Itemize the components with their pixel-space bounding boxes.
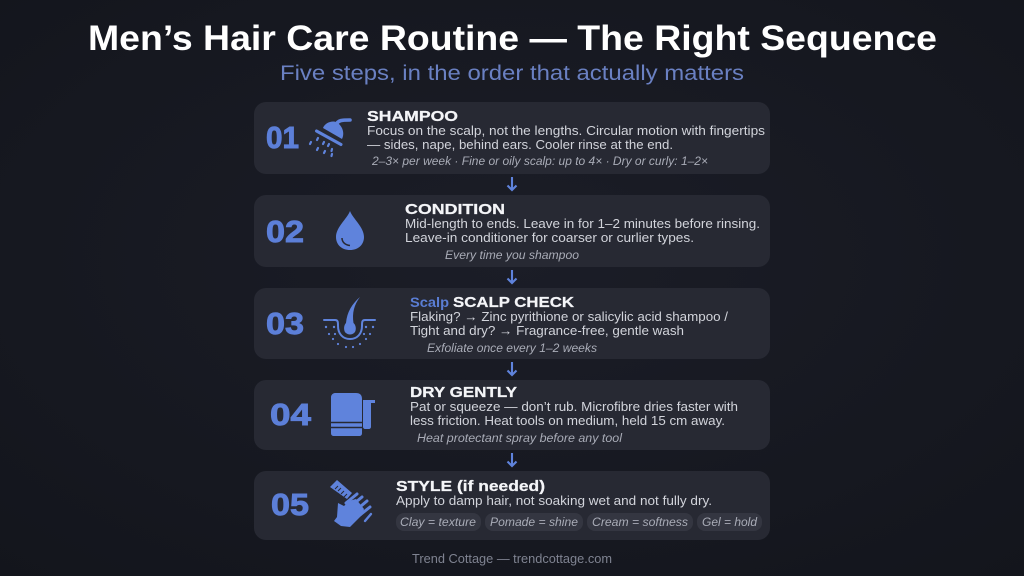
body text (367, 123, 766, 152)
icon: towel (331, 393, 375, 436)
heading: CONDITION (405, 201, 505, 218)
panel: step 4 dry gently (254, 380, 770, 450)
icon: hand with comb (330, 480, 371, 527)
heading: SHAMPOO (367, 108, 458, 125)
title: Men’s Hair Care Routine — The Right Sequence (88, 19, 937, 58)
pill: gel (697, 513, 762, 531)
arrow 2 to 3 (508, 270, 516, 283)
body text (410, 399, 738, 428)
pill: cream: Cream = softness (592, 517, 688, 529)
heading: Scalp (410, 294, 449, 310)
footer credit: Trend Cottage — trendcottage.com (412, 552, 612, 566)
pill: clay: Clay = texture (400, 517, 476, 529)
pill: gel: Gel = hold (702, 517, 758, 529)
pill: pomade: Pomade = shine (490, 517, 578, 529)
body text: Flaking? → Zinc pyrithione or salicylic acid shampoo / (410, 309, 728, 324)
heading: SCALP CHECK (453, 294, 574, 311)
body text: — sides, nape, behind ears. Cooler rinse at the end. (367, 137, 673, 152)
step number 05: 05 (271, 487, 309, 522)
step number 01: 01 (266, 120, 299, 155)
pill: cream (587, 513, 693, 531)
panel: step 1 shampoo (254, 102, 770, 174)
frequency note: Exfoliate once every 1–2 weeks (427, 343, 597, 355)
body text: Apply to damp hair, not soaking wet and not fully dry. (396, 493, 712, 508)
heading: DRY GENTLY (410, 384, 517, 401)
frequency note: Every time you shampoo (445, 250, 580, 262)
icon: shower head (310, 120, 350, 156)
frequency note: 2–3× per week · Fine or oily scalp: up to 4× · Dry or curly: 1–2× (371, 156, 708, 168)
body text: Tight and dry? → Fragrance-free, gentle wash (410, 323, 684, 338)
body text (405, 216, 760, 245)
step number 03: 03 (266, 306, 304, 341)
frequency note: Heat protectant spray before any tool (417, 433, 622, 445)
icon: water drop (336, 211, 364, 250)
body text: Pat or squeeze — don’t rub. Microfibre dries faster with (410, 399, 738, 414)
arrow 4 to 5 (508, 453, 516, 466)
panel: step 5 style (254, 471, 770, 540)
panel: step 2 condition (254, 195, 770, 267)
body text: Leave-in conditioner for coarser or curlier types. (405, 230, 694, 245)
arrow 1 to 2 (508, 177, 516, 190)
pill: clay (396, 513, 481, 531)
icon: hair follicle (324, 297, 375, 348)
body text (410, 309, 728, 338)
body text: less friction. Heat tools on medium, held 15 cm away. (410, 413, 725, 428)
body text: Focus on the scalp, not the lengths. Circular motion with fingertips (367, 123, 766, 138)
step number 04: 04 (270, 397, 312, 432)
heading: STYLE (if needed) (396, 478, 545, 495)
subtitle: Five steps, in the order that actually matters (280, 61, 744, 85)
pill: pomade (485, 513, 583, 531)
step number 02: 02 (266, 214, 304, 249)
body text: Mid-length to ends. Leave in for 1–2 minutes before rinsing. (405, 216, 760, 231)
panel: step 3 scalp check (254, 288, 770, 359)
arrow 3 to 4 (508, 362, 516, 375)
heading (410, 294, 574, 311)
